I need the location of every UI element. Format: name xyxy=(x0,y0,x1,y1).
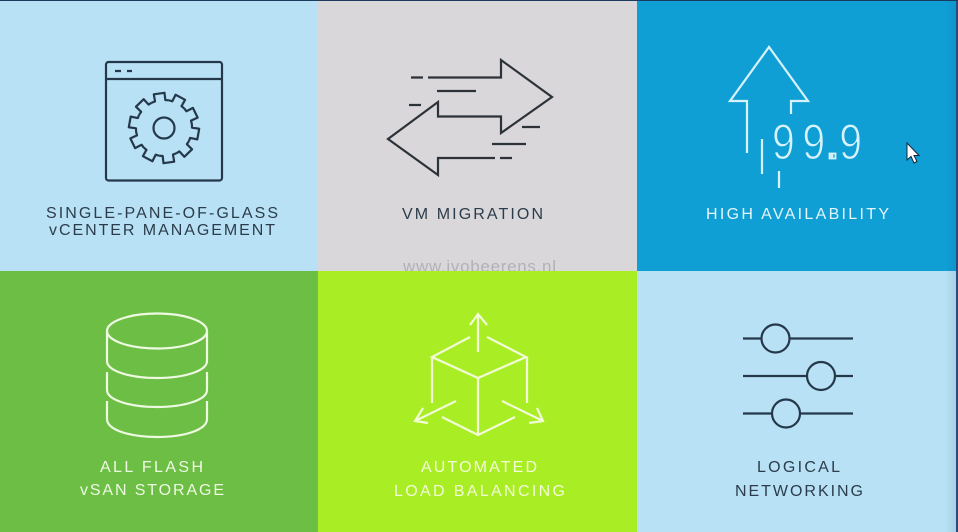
label: logical networking: LOGICAL xyxy=(757,459,840,476)
panel: logical networking xyxy=(637,271,958,532)
label: logical networking: NETWORKING xyxy=(735,483,863,500)
icon: up arrow with 99.9 xyxy=(730,47,862,188)
label: single-pane-of-glass vCenter management xyxy=(46,205,278,239)
label: all flash vSAN storage: vSAN STORAGE xyxy=(80,482,224,499)
label: all flash vSAN storage xyxy=(80,459,224,499)
icon: cube with outward arrows xyxy=(415,314,543,435)
label: logical networking xyxy=(735,459,863,500)
icon: database cylinder xyxy=(107,314,207,437)
panel: all flash vSAN storage xyxy=(0,271,318,532)
label: single-pane-of-glass vCenter management: vCENTER MANAGEMENT xyxy=(49,222,275,239)
label: automated load balancing: LOAD BALANCING xyxy=(394,483,565,500)
panel: VM migration xyxy=(318,0,637,276)
figure: 99.9: 99.9 xyxy=(772,114,862,170)
label: single-pane-of-glass vCenter management: SINGLE-PANE-OF-GLASS xyxy=(46,205,278,222)
icon: mouse cursor xyxy=(907,143,919,163)
icon: opposing arrows xyxy=(388,60,552,175)
label: automated load balancing: AUTOMATED xyxy=(421,459,537,476)
panel: vCenter management xyxy=(0,0,318,271)
panel: automated load balancing xyxy=(318,271,637,532)
watermark: www.ivobeerens.nl xyxy=(402,257,556,276)
label: high availability: HIGH AVAILABILITY xyxy=(706,206,889,223)
icon: sliders xyxy=(743,324,853,428)
icon: window with gear xyxy=(106,62,222,180)
label: all flash vSAN storage: ALL FLASH xyxy=(100,459,203,476)
label: VM migration: VM MIGRATION xyxy=(402,206,543,223)
label: automated load balancing xyxy=(394,459,565,500)
panel: high availability xyxy=(637,0,958,271)
